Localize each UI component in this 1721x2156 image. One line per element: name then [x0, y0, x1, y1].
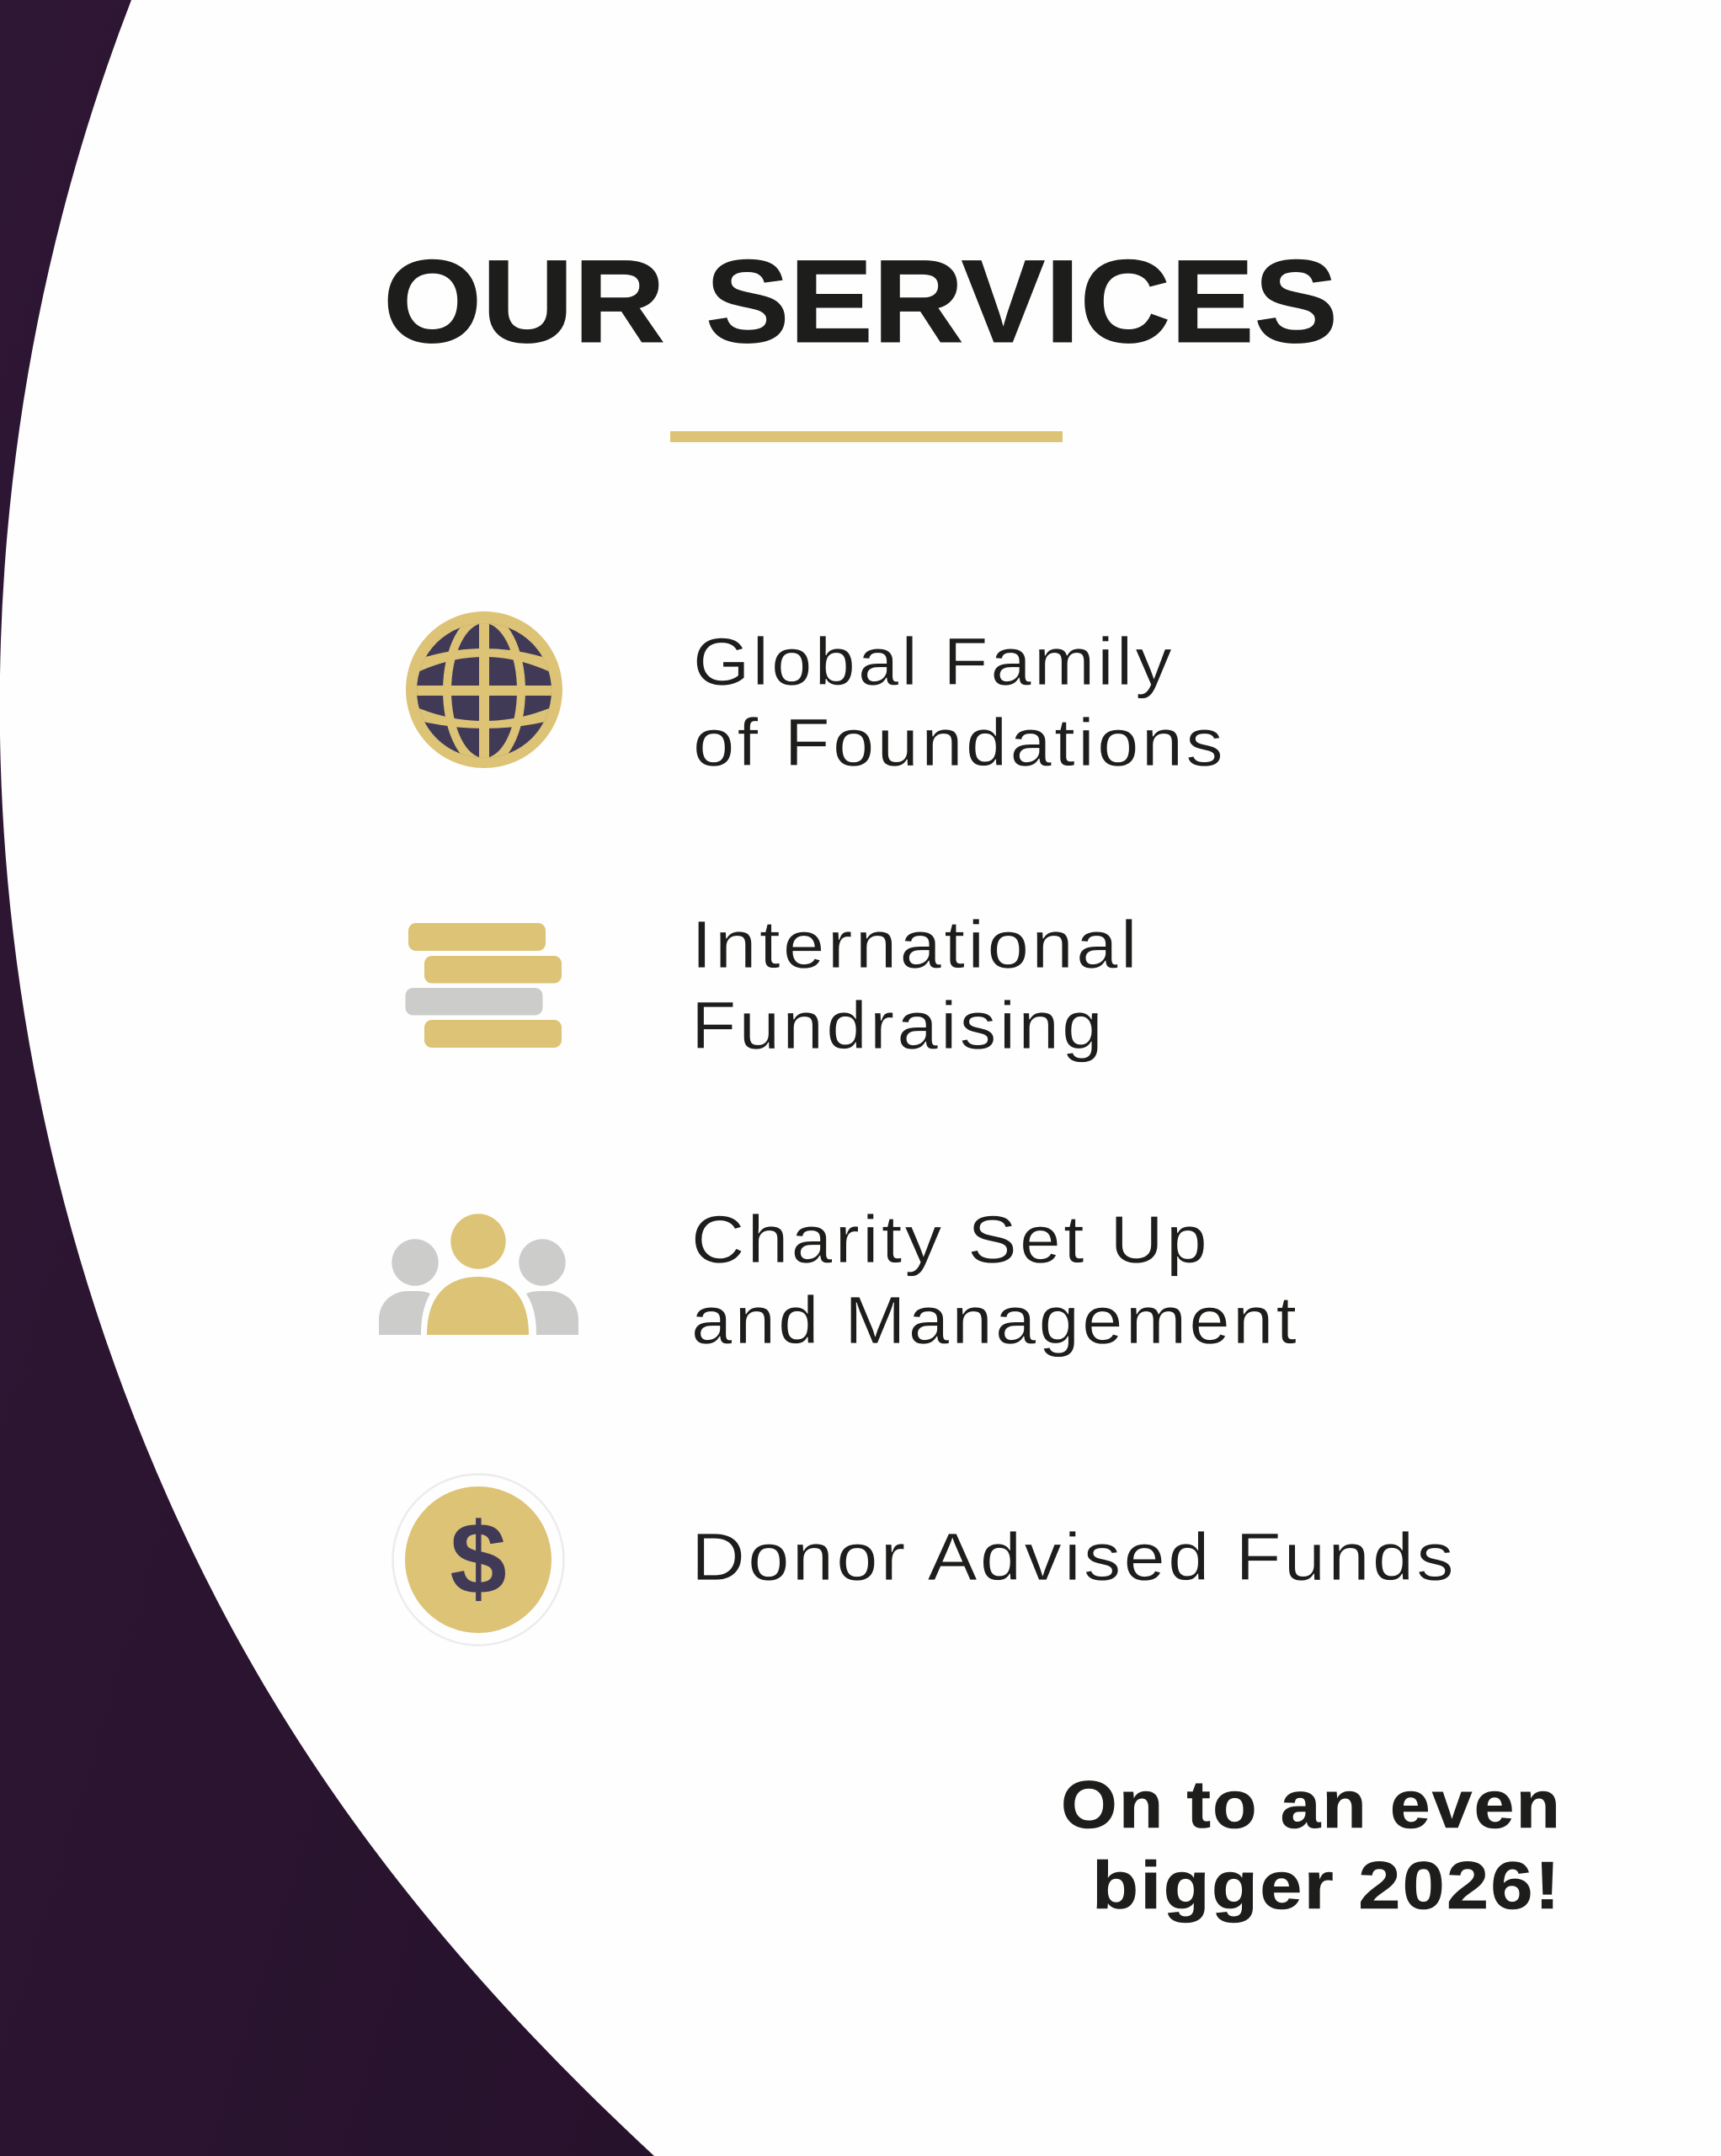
label: International Fundraising	[691, 907, 1140, 1063]
closing message: bigger 2026!	[1092, 1848, 1562, 1923]
title underline	[670, 431, 1063, 442]
icon: globe	[406, 611, 562, 768]
label: Charity Set Up and Management: and Management	[691, 1283, 1299, 1358]
service: global family of foundations	[406, 611, 1226, 780]
label: Charity Set Up and Management: Charity Set Up	[691, 1202, 1210, 1277]
title: SERVICES	[706, 235, 1338, 367]
service: international fundraising	[406, 907, 1140, 1063]
service: charity set up and management	[379, 1202, 1299, 1358]
icon: stacked bars	[406, 923, 562, 1048]
label: Donor Advised Funds: Donor Advised Funds	[691, 1519, 1457, 1594]
icon: dollar coin: $	[450, 1501, 507, 1615]
title: OUR	[383, 235, 665, 367]
label: International Fundraising: International	[691, 907, 1140, 982]
curved purple background shape	[0, 0, 654, 2156]
icon: dollar coin	[392, 1474, 564, 1646]
label: Global Family of Foundations	[693, 624, 1226, 780]
title	[383, 235, 1338, 367]
label: Global Family of Foundations: Global Family	[693, 624, 1175, 699]
label: International Fundraising: Fundraising	[691, 988, 1106, 1063]
closing message	[1061, 1767, 1562, 1923]
label: Global Family of Foundations: of Foundations	[693, 705, 1226, 780]
label: Charity Set Up and Management	[691, 1202, 1299, 1358]
service: donor advised funds	[392, 1474, 1457, 1646]
icon: three people	[379, 1214, 578, 1335]
closing message: On to an even	[1061, 1767, 1562, 1842]
